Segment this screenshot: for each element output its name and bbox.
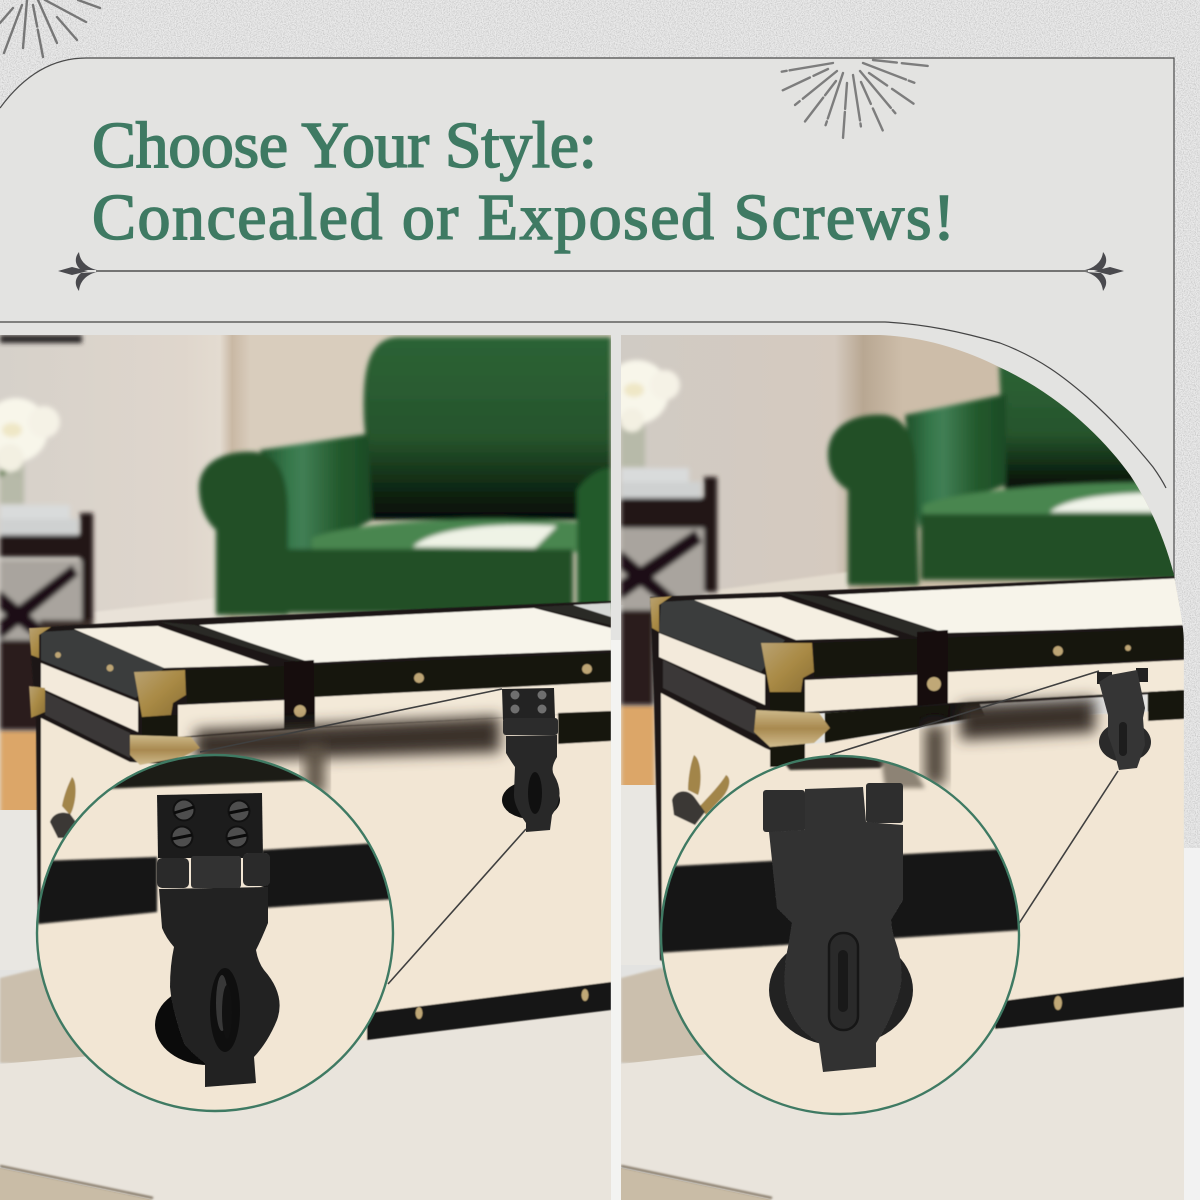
side table and flowers [0, 335, 93, 730]
sunburst: top left [0, 0, 100, 57]
callout line right [830, 671, 1118, 925]
title: Choose Your Style: [92, 109, 597, 182]
gutter between photos [611, 640, 621, 1200]
small hasp [1097, 668, 1151, 770]
room backdrop [0, 335, 611, 1200]
hasp without visible screws [763, 783, 913, 1072]
room backdrop [621, 335, 1184, 1200]
curved frame line [0, 322, 1166, 488]
photo: exposed screws room [605, 335, 1184, 1200]
small hasp [502, 688, 560, 832]
trunk [650, 576, 1184, 1040]
panel outline [0, 58, 1174, 580]
hasp with four screws [155, 793, 280, 1087]
title: Concealed or Exposed Screws! [92, 181, 955, 254]
ornamental divider [58, 252, 1124, 291]
photo: concealed screws room [0, 335, 611, 1200]
green armchair [199, 337, 611, 615]
sunburst: top right [777, 60, 928, 138]
magnifier: concealed hasp [30, 750, 400, 1111]
green armchair [828, 365, 1184, 585]
trunk [29, 601, 611, 1040]
magnifier: exposed hasp [655, 752, 1025, 1114]
title [92, 109, 955, 254]
callout line left [200, 689, 526, 984]
side table and flowers [605, 360, 717, 705]
